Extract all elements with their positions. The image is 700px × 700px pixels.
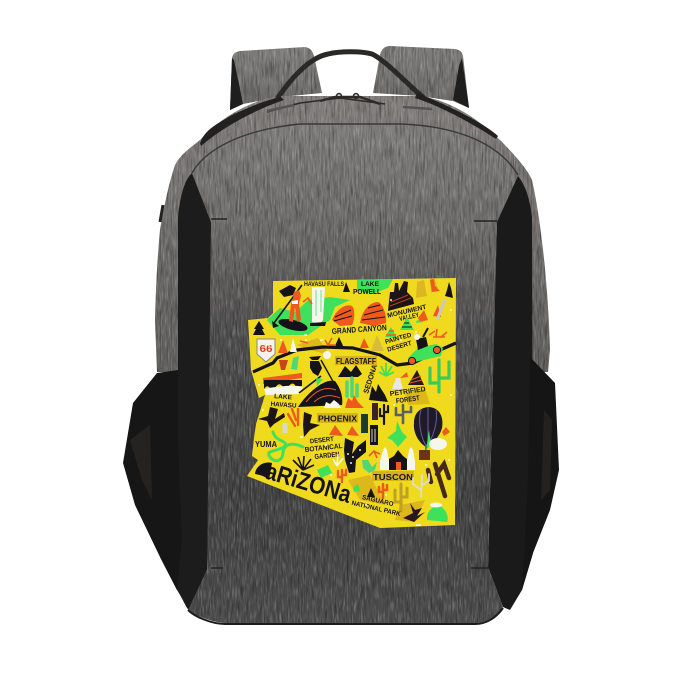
shell fabric texture xyxy=(150,40,560,380)
London Bridge at Lake Havasu xyxy=(263,373,303,395)
orange cactus xyxy=(288,409,298,426)
right mesh pocket xyxy=(522,357,559,590)
boots / black rocks xyxy=(338,365,362,377)
Petrified Forest label: PETRIFIED xyxy=(389,386,426,398)
Havasu Falls label: HAVASU FALLS xyxy=(304,281,345,288)
hair xyxy=(279,285,296,297)
orange plant xyxy=(369,451,380,458)
left shoulder strap base xyxy=(200,97,284,146)
Painted Desert label xyxy=(384,332,415,354)
orange lantern and green leaf xyxy=(279,360,288,370)
Monument Valley butte xyxy=(388,281,414,311)
big brown cactus xyxy=(428,464,449,496)
lakes: green water xyxy=(267,279,393,335)
black white building xyxy=(370,425,378,445)
scattered white dashes xyxy=(258,300,452,525)
green plants xyxy=(379,363,394,376)
board xyxy=(277,317,309,333)
Lake Powell label xyxy=(353,281,382,296)
painted hills xyxy=(385,317,414,338)
grey saguaro xyxy=(396,405,411,423)
top carry handle xyxy=(277,52,424,99)
black saguaro xyxy=(380,405,388,424)
black rock xyxy=(367,488,375,497)
left pad black edge xyxy=(230,58,243,110)
Lake Powell label: LAKE xyxy=(361,281,380,288)
state outline xyxy=(247,278,456,528)
green striped building xyxy=(361,414,368,433)
paddle xyxy=(274,285,302,323)
Lake Powell label: POWELL xyxy=(353,289,382,296)
Mission San Xavier xyxy=(380,447,415,470)
white cactus xyxy=(413,474,429,497)
Saguaro National Park label: SAGUARO xyxy=(361,494,394,508)
brown post xyxy=(372,403,378,420)
orange sprout plants xyxy=(300,298,336,345)
white stripes xyxy=(392,378,403,389)
Lake Havasu label xyxy=(270,393,298,410)
dark prickly cactus west xyxy=(258,407,285,428)
Monument Valley label: VALLEY xyxy=(399,312,420,323)
left mesh pocket xyxy=(123,370,182,590)
right pocket mesh texture xyxy=(541,410,552,500)
right shoulder strap base xyxy=(415,93,498,139)
Saguaro National Park label: NATIONAL PARK xyxy=(351,500,401,518)
Monument Valley label xyxy=(387,304,429,325)
Flagstaff label: FLAGSTAFF xyxy=(336,357,376,366)
hot air balloon xyxy=(414,407,442,460)
small orange and khaki mesas xyxy=(416,278,438,298)
Grand Canyon rocks xyxy=(332,302,386,326)
black prickly pear xyxy=(344,438,366,473)
bottom dark cactus xyxy=(403,503,425,522)
swimsuit xyxy=(292,300,298,304)
Phoenix label: PHOENIX xyxy=(318,414,358,424)
green white hats xyxy=(416,320,424,323)
big green saguaro xyxy=(430,360,449,392)
green prickly pear xyxy=(387,421,407,447)
Route 66 shield: 66 xyxy=(260,343,273,355)
left black side panel xyxy=(160,173,212,609)
left shoulder pad xyxy=(230,47,322,110)
handle front xyxy=(277,52,424,99)
side zipper pull xyxy=(160,205,163,222)
Arizona map graphic xyxy=(247,278,456,528)
white building stripes xyxy=(372,429,375,442)
Painted Desert label: DESERT xyxy=(387,340,413,354)
road: Route 66 xyxy=(253,343,456,372)
zipper xyxy=(267,94,432,112)
Desert Botanical Garden label: GARDEN xyxy=(314,451,340,461)
Petrified Forest label: FOREST xyxy=(396,395,421,405)
darker yellow patches xyxy=(297,338,430,522)
green round cactus xyxy=(362,460,377,473)
grey post cactus xyxy=(282,423,288,433)
Phoenix mountain xyxy=(298,381,364,408)
red rock xyxy=(408,370,424,385)
green barrel cactus xyxy=(427,502,448,522)
orange small cactus xyxy=(338,470,346,482)
top seam xyxy=(192,124,518,175)
pale cactus xyxy=(347,378,357,396)
Sedona label: SEDONA xyxy=(361,363,379,395)
agave plant xyxy=(293,456,314,470)
Petrified Forest label xyxy=(389,386,427,406)
Lake Havasu label: HAVASU xyxy=(270,401,297,410)
Desert Botanical Garden label: BOTANICAL xyxy=(304,443,344,454)
Painted Desert label: PAINTED xyxy=(384,332,412,346)
gray post xyxy=(437,300,445,320)
backpack xyxy=(123,40,560,630)
right pad black edge xyxy=(453,58,469,108)
Sedona black rocks xyxy=(369,384,388,402)
Grand Canyon label: GRAND CANYON xyxy=(332,323,387,336)
body xyxy=(289,290,301,322)
Monument Valley label: MONUMENT xyxy=(387,304,427,320)
hiker xyxy=(299,351,335,393)
Arizona title: aRiZONa xyxy=(262,458,355,509)
bottom edge xyxy=(188,608,503,624)
panel fabric texture xyxy=(185,120,520,630)
classic car with driver xyxy=(408,328,443,365)
left pocket mesh texture xyxy=(130,425,152,500)
orange plant xyxy=(429,329,447,337)
white sheep xyxy=(429,438,447,450)
Desert Botanical Garden label: DESERT xyxy=(310,436,334,445)
pine trees xyxy=(253,282,384,353)
Lake Havasu label: LAKE xyxy=(274,393,293,401)
Route 66 shield xyxy=(257,339,275,362)
right black side panel xyxy=(488,176,533,610)
black vase rock xyxy=(445,282,453,298)
orange flames xyxy=(418,305,441,322)
green cylinder cactus xyxy=(317,465,332,478)
right shoulder pad xyxy=(373,46,469,108)
paddle boarder xyxy=(272,285,309,333)
green snake xyxy=(269,432,303,461)
Yuma label: YUMA xyxy=(255,439,277,449)
white plant xyxy=(333,454,343,466)
dark cactus Phoenix xyxy=(303,412,320,437)
Saguaro National Park label xyxy=(351,492,403,518)
orange cactus xyxy=(379,484,387,498)
front heathered panel xyxy=(188,124,518,623)
Tuscon label: TUSCON xyxy=(373,472,413,482)
waterfall xyxy=(310,287,326,326)
orange bird xyxy=(442,427,450,436)
seam ticks xyxy=(211,219,497,568)
orange stones xyxy=(329,425,359,436)
khaki cactus xyxy=(395,484,407,511)
green bush xyxy=(353,484,360,492)
Desert Botanical Garden label xyxy=(304,435,344,462)
bag outer shell xyxy=(155,96,550,372)
